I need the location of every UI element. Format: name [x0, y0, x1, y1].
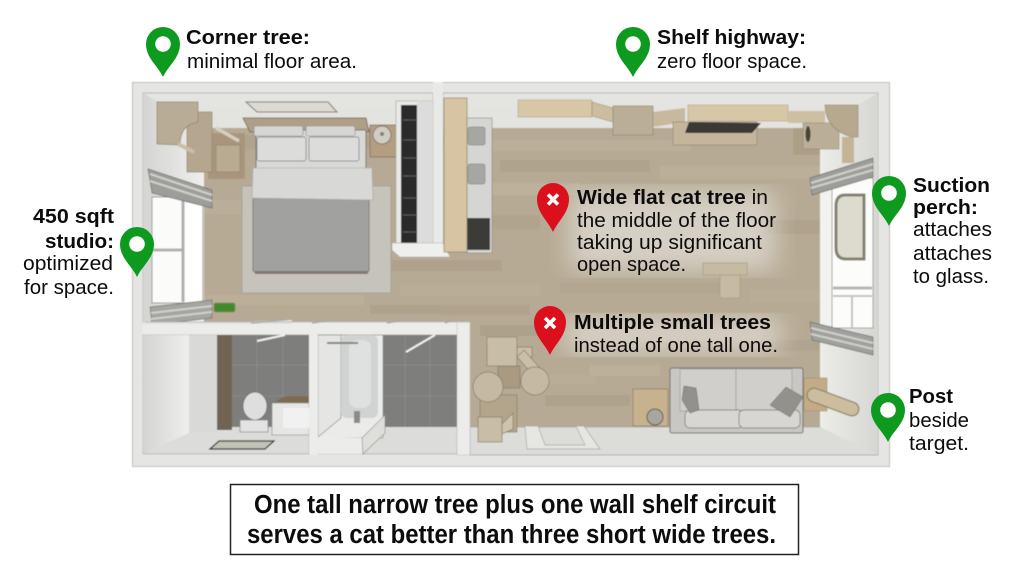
label: shelf highway: zero floor space. — [657, 50, 807, 73]
suction perch — [836, 195, 864, 259]
curtain top left — [148, 169, 212, 208]
pin: corner tree — [146, 27, 180, 77]
label: post beside target — [871, 385, 969, 455]
bathtub — [318, 335, 385, 454]
flat cat tree — [703, 263, 747, 298]
ceiling vent — [246, 102, 337, 112]
right wall — [820, 93, 878, 455]
conclusion box: One tall narrow tree plus one wall shelf circuit — [254, 491, 776, 519]
callout: wide flat cat tree — [537, 183, 776, 276]
label: suction perch: Suction — [913, 174, 990, 197]
pin: post — [871, 393, 905, 442]
label: studio size — [23, 205, 154, 299]
floor strip — [470, 427, 878, 455]
wall stub — [457, 322, 470, 455]
nightstand and lamp — [370, 125, 397, 157]
outer walls — [132, 82, 890, 466]
callout: multiple small trees — [534, 306, 778, 357]
callout: multiple small trees: Multiple small trees — [574, 311, 771, 334]
callout: multiple small trees: instead of one tall one. — [574, 334, 778, 357]
label: studio size: 450 sqft — [33, 205, 114, 228]
bathroom B — [318, 335, 457, 454]
callout: wide flat cat tree: the middle of the floor — [577, 209, 776, 232]
label: studio size: studio: — [45, 230, 114, 253]
divider wall — [433, 82, 443, 257]
window left — [152, 197, 203, 303]
scratching post — [804, 378, 852, 411]
wood floor — [204, 128, 820, 428]
label: corner tree: Corner tree: — [186, 26, 310, 49]
icon: toilet — [240, 392, 268, 432]
pin: suction perch — [872, 176, 906, 226]
label: suction perch: to glass. — [913, 265, 989, 288]
label: suction perch — [872, 174, 992, 288]
shelf highway — [518, 100, 858, 163]
vanity — [272, 396, 309, 435]
curtain bottom right — [810, 322, 873, 355]
pin: red cross 1 — [537, 183, 569, 232]
bathroom block — [143, 319, 470, 455]
conclusion box — [230, 484, 798, 554]
cat tree: corner — [157, 102, 245, 179]
callout: wide flat cat tree: open space. — [577, 253, 686, 276]
label: corner tree — [146, 26, 357, 77]
label: post beside target: beside — [909, 409, 969, 432]
pin: shelf highway — [616, 27, 650, 77]
door mat — [525, 426, 600, 449]
label: corner tree: minimal floor area. — [187, 50, 357, 73]
rug — [242, 186, 391, 293]
bathroom A — [143, 335, 309, 454]
side table — [633, 389, 668, 426]
label: suction perch: attaches — [913, 218, 992, 241]
bedroom and main room cavity — [143, 93, 878, 455]
bed — [243, 118, 373, 274]
sofa — [670, 368, 803, 433]
callout: wide flat cat tree: Wide flat cat tree in — [577, 186, 768, 209]
floor plan — [132, 82, 890, 466]
label: shelf highway: Shelf highway: — [657, 26, 806, 49]
curtain top right — [810, 158, 873, 195]
label: post beside target: Post — [909, 385, 953, 408]
window right — [820, 178, 873, 328]
bedroom left wall — [143, 93, 204, 322]
plant — [214, 303, 235, 312]
label: studio size: optimized — [23, 252, 113, 275]
text halo — [570, 192, 775, 270]
label: suction perch: attaches — [913, 242, 992, 265]
small trees cluster — [473, 337, 549, 442]
label: shelf highway — [616, 26, 807, 77]
curtain bottom left — [150, 300, 212, 325]
label: studio size: for space. — [24, 276, 114, 299]
pin: studio — [120, 227, 154, 277]
callout: wide flat cat tree: taking up significant — [577, 231, 762, 254]
closet — [392, 101, 450, 257]
label: post beside target: target. — [909, 432, 969, 455]
kitchen — [444, 98, 492, 253]
bath mat — [210, 441, 274, 449]
conclusion box: serves a cat better than three short wide trees. — [247, 521, 776, 549]
label: suction perch: perch: — [913, 196, 978, 219]
pin: red cross 2 — [534, 306, 566, 355]
